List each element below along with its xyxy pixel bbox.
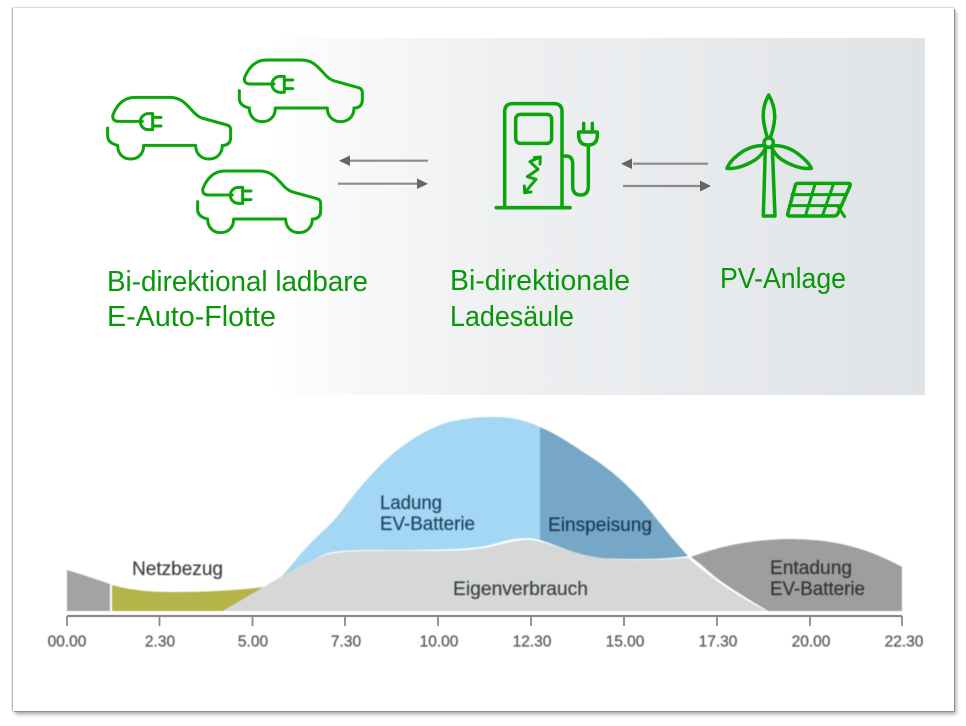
axis labels: 7.30 <box>331 634 361 650</box>
chart labels: Einspeisung <box>548 515 652 536</box>
x axis <box>67 616 902 626</box>
icon: left car <box>108 97 231 159</box>
label: charging station: Ladesäule <box>450 301 574 333</box>
chart labels: Eigenverbrauch <box>453 579 588 600</box>
chart: daily energy profile <box>48 417 924 650</box>
arrows: charger and PV <box>621 158 711 192</box>
chart labels: Ladung <box>380 493 442 514</box>
chart labels: Netzbezug <box>132 559 223 580</box>
area: Netzbezug <box>112 585 264 611</box>
label: fleet <box>107 266 368 333</box>
icon: wind turbine and solar panel <box>727 95 850 217</box>
chart labels: EV-Batterie <box>380 514 475 535</box>
area: Ladung EV-Batterie <box>280 417 540 578</box>
axis labels: 5.00 <box>238 634 268 650</box>
chart labels <box>132 493 865 600</box>
area: Entladung EV-Batterie <box>691 539 902 611</box>
chart areas <box>67 417 902 611</box>
chart labels: Entadung <box>770 558 852 579</box>
label: charging station <box>450 265 630 333</box>
axis labels: 2.30 <box>145 634 175 650</box>
axis labels: 10.00 <box>420 634 459 650</box>
label: PV system: PV-Anlage <box>720 263 846 295</box>
label: fleet: Bi-direktional ladbare <box>107 266 368 298</box>
panel: gradient background <box>278 38 925 395</box>
axis labels <box>48 634 924 650</box>
axis labels: 00.00 <box>48 634 87 650</box>
label: fleet: E-Auto-Flotte <box>107 301 276 333</box>
axis labels: 20.00 <box>792 634 831 650</box>
axis labels: 12.30 <box>513 634 552 650</box>
icon: bottom car <box>198 171 321 233</box>
axis labels: 17.30 <box>699 634 738 650</box>
icon: charging station <box>496 104 597 208</box>
area: grid draw night <box>67 570 110 611</box>
axis labels: 22.30 <box>885 634 924 650</box>
area: Einspeisung <box>540 427 688 559</box>
chart labels: EV-Batterie <box>770 579 865 600</box>
arrows: fleet and charger <box>338 156 428 189</box>
icon: car fleet <box>108 60 362 233</box>
label: charging station: Bi-direktionale <box>450 265 630 297</box>
area: Eigenverbrauch <box>223 540 767 611</box>
axis labels: 15.00 <box>606 634 645 650</box>
icon: top car <box>239 60 362 122</box>
